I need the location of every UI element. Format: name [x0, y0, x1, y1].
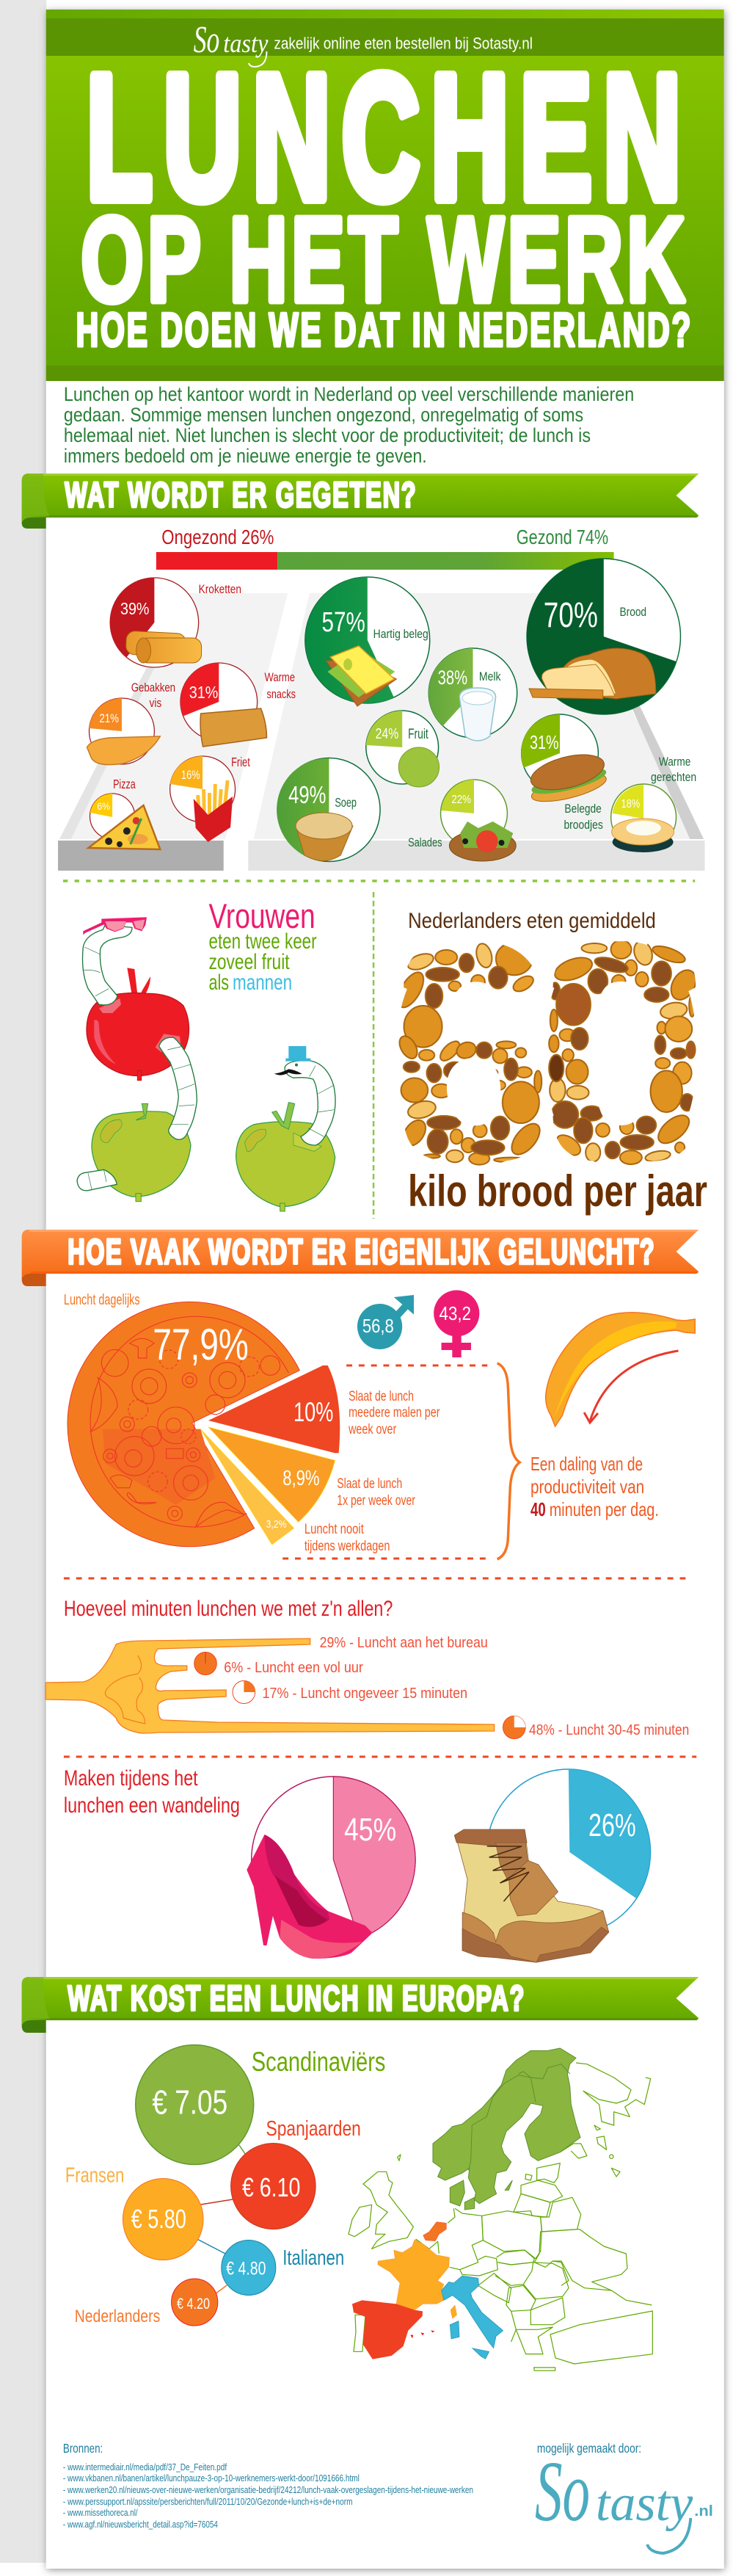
bubble: spanjaarden: € 6.10: [242, 2173, 300, 2202]
pie: kroketten: 39%: [120, 599, 149, 618]
health legend labels and bar: Ongezond 26%: [161, 526, 274, 548]
bubble: spanjaarden: [231, 2117, 361, 2229]
pie: soep: [277, 758, 380, 862]
divider red: [64, 1577, 689, 1580]
divider green: [63, 879, 695, 882]
text: vrouwen fruit: eten twee keer: [208, 929, 317, 954]
icon: female symbol: [434, 1291, 479, 1357]
bubble: scandinaviers: Scandinaviërs: [252, 2047, 385, 2077]
bread number 60: 60: [388, 882, 706, 1225]
divider red: [64, 1756, 696, 1757]
pie: pizza: Pizza: [113, 777, 136, 791]
title line 3: HOE DOEN WE DAT IN NEDERLAND?: [76, 302, 690, 357]
sources: Bronnen:: [63, 2441, 103, 2456]
red apple: [87, 968, 189, 1081]
pie: warme gerechten: Warme: [659, 755, 690, 769]
tagline: zakelijk online eten bestellen bij Sotasty.nl: [274, 34, 533, 53]
text: vrouwen fruit: als: [208, 970, 229, 995]
health legend labels and bar: [156, 526, 614, 570]
pie: warme snacks: Warme: [265, 670, 295, 684]
banner heading: WAT KOST EEN LUNCH IN EUROPA?: [68, 1978, 524, 2018]
logo footer: [535, 2441, 713, 2553]
pie: salades: 22%: [451, 794, 471, 806]
sources: - www.agf.nl/nieuwsbericht_detail.asp?id=76054: [63, 2519, 218, 2530]
worm right: [285, 1061, 335, 1145]
intro text: gedaan. Sommige mensen lunchen ongezond, onregelmatig of soms: [64, 404, 583, 426]
icon: banana: [546, 1313, 695, 1426]
banner: wat kost een lunch: [22, 1977, 699, 2033]
pie: warme snacks: snacks: [266, 687, 296, 701]
heading: wandeling: [64, 1766, 240, 1818]
slice 3,2 percent: [200, 1429, 294, 1545]
pie: women walking: 45%: [344, 1812, 396, 1848]
text: productiviteit: [530, 1454, 659, 1520]
heading: hoeveel minuten: Hoeveel minuten lunchen we met z'n allen?: [64, 1597, 393, 1621]
label: luncht dagelijks: Luncht dagelijks: [64, 1292, 140, 1308]
sources: [63, 2441, 473, 2530]
logo top: [194, 19, 269, 67]
slice 10 percent: [208, 1365, 340, 1453]
logo footer: mogelijk gemaakt door:: [537, 2441, 641, 2456]
heading: wandeling: lunchen een wandeling: [64, 1793, 240, 1818]
mini pie 48 percent: 48% - Luncht 30-45 minuten: [529, 1722, 689, 1738]
pie descriptions: Luncht nooit: [304, 1522, 364, 1537]
pie main slice: [68, 1302, 299, 1547]
pie: men walking: 26%: [588, 1807, 636, 1843]
pie: belegde broodjes: Belegde: [564, 802, 602, 816]
pie descriptions: tijdens werkdagen: [304, 1539, 390, 1554]
bubble: italianen: Italianen: [282, 2246, 344, 2270]
intro text: [64, 383, 634, 467]
icon: high heel: [247, 1835, 373, 1959]
pie: fruit: 24%: [376, 726, 398, 742]
pie: gebakken vis: 21%: [99, 711, 119, 725]
text: productiviteit: minuten per dag.: [550, 1500, 659, 1520]
scandinavia: [433, 2048, 580, 2210]
pie descriptions: meedere malen per: [349, 1405, 440, 1421]
text: vrouwen fruit: mannen: [233, 970, 292, 995]
pie: fruit: Fruit: [408, 727, 428, 742]
connector lines: [197, 2145, 247, 2293]
pie: belegde broodjes: 31%: [530, 733, 559, 753]
pie: belegde broodjes: [521, 714, 609, 832]
grey side bar: [0, 0, 46, 2563]
icon: fork: [45, 1639, 495, 1733]
icon: female symbol: 43,2: [440, 1304, 471, 1324]
pie: warme gerechten: [611, 755, 696, 852]
bubble: nederlanders: [75, 2279, 218, 2326]
icon: male symbol: 56,8: [362, 1316, 394, 1337]
pie: friet: Friet: [231, 755, 250, 769]
text: vrouwen fruit: Vrouwen: [208, 897, 316, 935]
sources: - www.intermediair.nl/media/pdf/37_De_Feiten.pdf: [63, 2461, 227, 2472]
pie: brood: [527, 559, 680, 714]
green apple left: [92, 1103, 191, 1202]
text: productiviteit: 40: [530, 1500, 546, 1520]
title line 1: LUNCHEN: [87, 39, 681, 236]
mini pie 17 percent: [233, 1681, 467, 1703]
worm top: [82, 925, 132, 1005]
bubble: spanjaarden: Spanjaarden: [266, 2117, 361, 2141]
pie: belegde broodjes: broodjes: [564, 818, 603, 832]
pie value labels: 8,9%: [282, 1467, 320, 1490]
pie: hartig beleg: 57%: [322, 607, 365, 638]
sources: - www.werken20.nl/nieuws-over-nieuwe-werken/organisatie-bedrijf/24212/lunch-vaak-overgeslagen-tijdens-het-nieuwe-werken: [63, 2484, 473, 2495]
sources: - www.vkbanen.nl/banen/artikel/lunchpauze-3-op-10-werknemers-werkt-door/1091666.html: [63, 2472, 360, 2484]
heading: wandeling: Maken tijdens het: [64, 1766, 198, 1790]
pie: fruit: [366, 711, 440, 787]
pie: kroketten: [110, 578, 241, 667]
pie: hartig beleg: [305, 577, 430, 706]
mini pie 17 percent: 17% - Luncht ongeveer 15 minuten: [263, 1686, 467, 1702]
logo footer: So: [535, 2443, 590, 2539]
pie: friet: [170, 755, 250, 842]
worm middle: [159, 1037, 197, 1139]
intro text: Lunchen op het kantoor wordt in Nederland op veel verschillende manieren: [64, 383, 634, 405]
netherlands: [423, 2222, 446, 2241]
text: productiviteit: productiviteit van: [530, 1477, 644, 1498]
text: productiviteit: Een daling van de: [530, 1454, 643, 1475]
icon: male symbol: [357, 1295, 414, 1349]
logo footer: .nl: [694, 2503, 713, 2519]
bubble: italianen: € 4.80: [226, 2259, 266, 2279]
pie descriptions: week over: [348, 1422, 396, 1437]
pie value labels: 10%: [293, 1397, 333, 1427]
outlines other countries: [349, 2063, 652, 2370]
text: nederlanders eten gemiddeld: Nederlanders eten gemiddeld: [408, 909, 656, 933]
pie descriptions: Slaat de lunch: [337, 1476, 402, 1492]
logo top: tasty: [223, 29, 269, 58]
bread corners filling out the number blocks: [404, 942, 696, 1161]
france: [378, 2240, 450, 2310]
bubble: scandinaviers: € 7.05: [152, 2083, 227, 2122]
icon: top hat: [285, 1046, 310, 1062]
banner heading: HOE VAAK WORDT ER EIGENLIJK GELUNCHT?: [68, 1232, 654, 1271]
mini pie 48 percent: [503, 1716, 689, 1738]
green apple right: [236, 1103, 335, 1211]
divider vertical: [373, 892, 374, 1219]
pie: warme snacks: [180, 663, 296, 747]
pie: salades: Salades: [408, 835, 442, 849]
table: healthy tray: [248, 593, 705, 871]
pie: soep: Soep: [335, 795, 357, 810]
pie: hartig beleg: Hartig beleg: [373, 627, 428, 641]
pie value labels: [153, 1320, 333, 1531]
bubble: italianen: [222, 2241, 344, 2295]
pie value labels: 3,2%: [266, 1519, 287, 1531]
brace dashed lines: [282, 1365, 487, 1559]
bubble: scandinaviers: [136, 2045, 385, 2164]
pie descriptions: [304, 1389, 440, 1554]
banner heading: WAT WORDT ER GEGETEN?: [65, 475, 416, 515]
pie descriptions: Slaat de lunch: [349, 1389, 414, 1404]
bubble: nederlanders: € 4.20: [177, 2296, 210, 2312]
intro text: immers bedoeld om je nieuwe energie te geven.: [64, 445, 427, 467]
pie: brood: 70%: [544, 596, 598, 635]
table: unhealthy tray: [58, 593, 288, 871]
illustration: apples and worms: [77, 917, 335, 1211]
pie: gebakken vis: vis: [149, 696, 161, 710]
pie: melk: [428, 648, 517, 741]
spain: [352, 2300, 423, 2359]
pie: soep: 49%: [288, 781, 326, 808]
text: 29 percent: 29% - Luncht aan het bureau: [320, 1635, 488, 1651]
text: vrouwen fruit: zoveel fruit: [208, 950, 290, 974]
italy: [442, 2276, 503, 2348]
pizza pie chart: [68, 1302, 340, 1547]
arrow down: [584, 1351, 679, 1423]
pie: friet: 16%: [181, 768, 200, 782]
health legend labels and bar: Gezond 74%: [517, 526, 608, 548]
brace: [497, 1363, 519, 1559]
title line 2: OP HET WERK: [81, 192, 685, 327]
mini pie 6 percent: 6% - Luncht een vol uur: [224, 1660, 363, 1676]
icon: boot: [454, 1829, 609, 1962]
bubble: fransen: Fransen: [65, 2163, 124, 2188]
pie: pizza: 6%: [97, 800, 110, 812]
pie: kroketten: Kroketten: [199, 582, 241, 596]
banner: wat wordt er gegeten: [22, 474, 699, 529]
pie: gebakken vis: [87, 681, 175, 765]
icon: sunglasses: [83, 917, 147, 935]
pie: warme gerechten: gerechten: [651, 770, 696, 784]
pie: men walking: [486, 1769, 650, 1935]
pie: women walking: [252, 1777, 415, 1942]
pie descriptions: 1x per week over: [337, 1493, 415, 1509]
text: vrouwen fruit: [208, 897, 317, 995]
worm tail: [77, 1169, 117, 1191]
logo footer: tasty: [596, 2475, 693, 2532]
slice 8,9 percent: [208, 1427, 335, 1522]
pie: warme gerechten: 18%: [621, 798, 640, 810]
pie: melk: Melk: [479, 670, 501, 683]
sources: - www.perssupport.nl/apssite/persberichten/full/2011/10/20/Gezonde+lunch+is+de+norm: [63, 2496, 353, 2507]
banner: hoe vaak: [22, 1230, 699, 1286]
header block: [46, 10, 724, 381]
map of europe: [349, 2048, 652, 2370]
mini pie 6 percent: [194, 1652, 363, 1676]
sources: - www.missethoreca.nl/: [63, 2507, 138, 2518]
pie value labels: 77,9%: [153, 1320, 249, 1369]
pie: melk: 38%: [438, 667, 467, 689]
pie: warme snacks: 31%: [189, 683, 218, 702]
bubble: nederlanders: Nederlanders: [75, 2307, 160, 2326]
pie: brood: Brood: [620, 605, 646, 619]
pie: salades: [408, 780, 516, 861]
pie: pizza: [89, 777, 160, 849]
bubble: fransen: € 5.80: [131, 2205, 186, 2234]
intro text: helemaal niet. Niet lunchen is slecht voor de productiviteit; de lunch is: [64, 424, 591, 446]
logo top: So: [194, 19, 219, 61]
bubble: fransen: [65, 2163, 203, 2260]
pie: gebakken vis: Gebakken: [131, 681, 175, 694]
icon: moustache: [275, 1070, 302, 1075]
